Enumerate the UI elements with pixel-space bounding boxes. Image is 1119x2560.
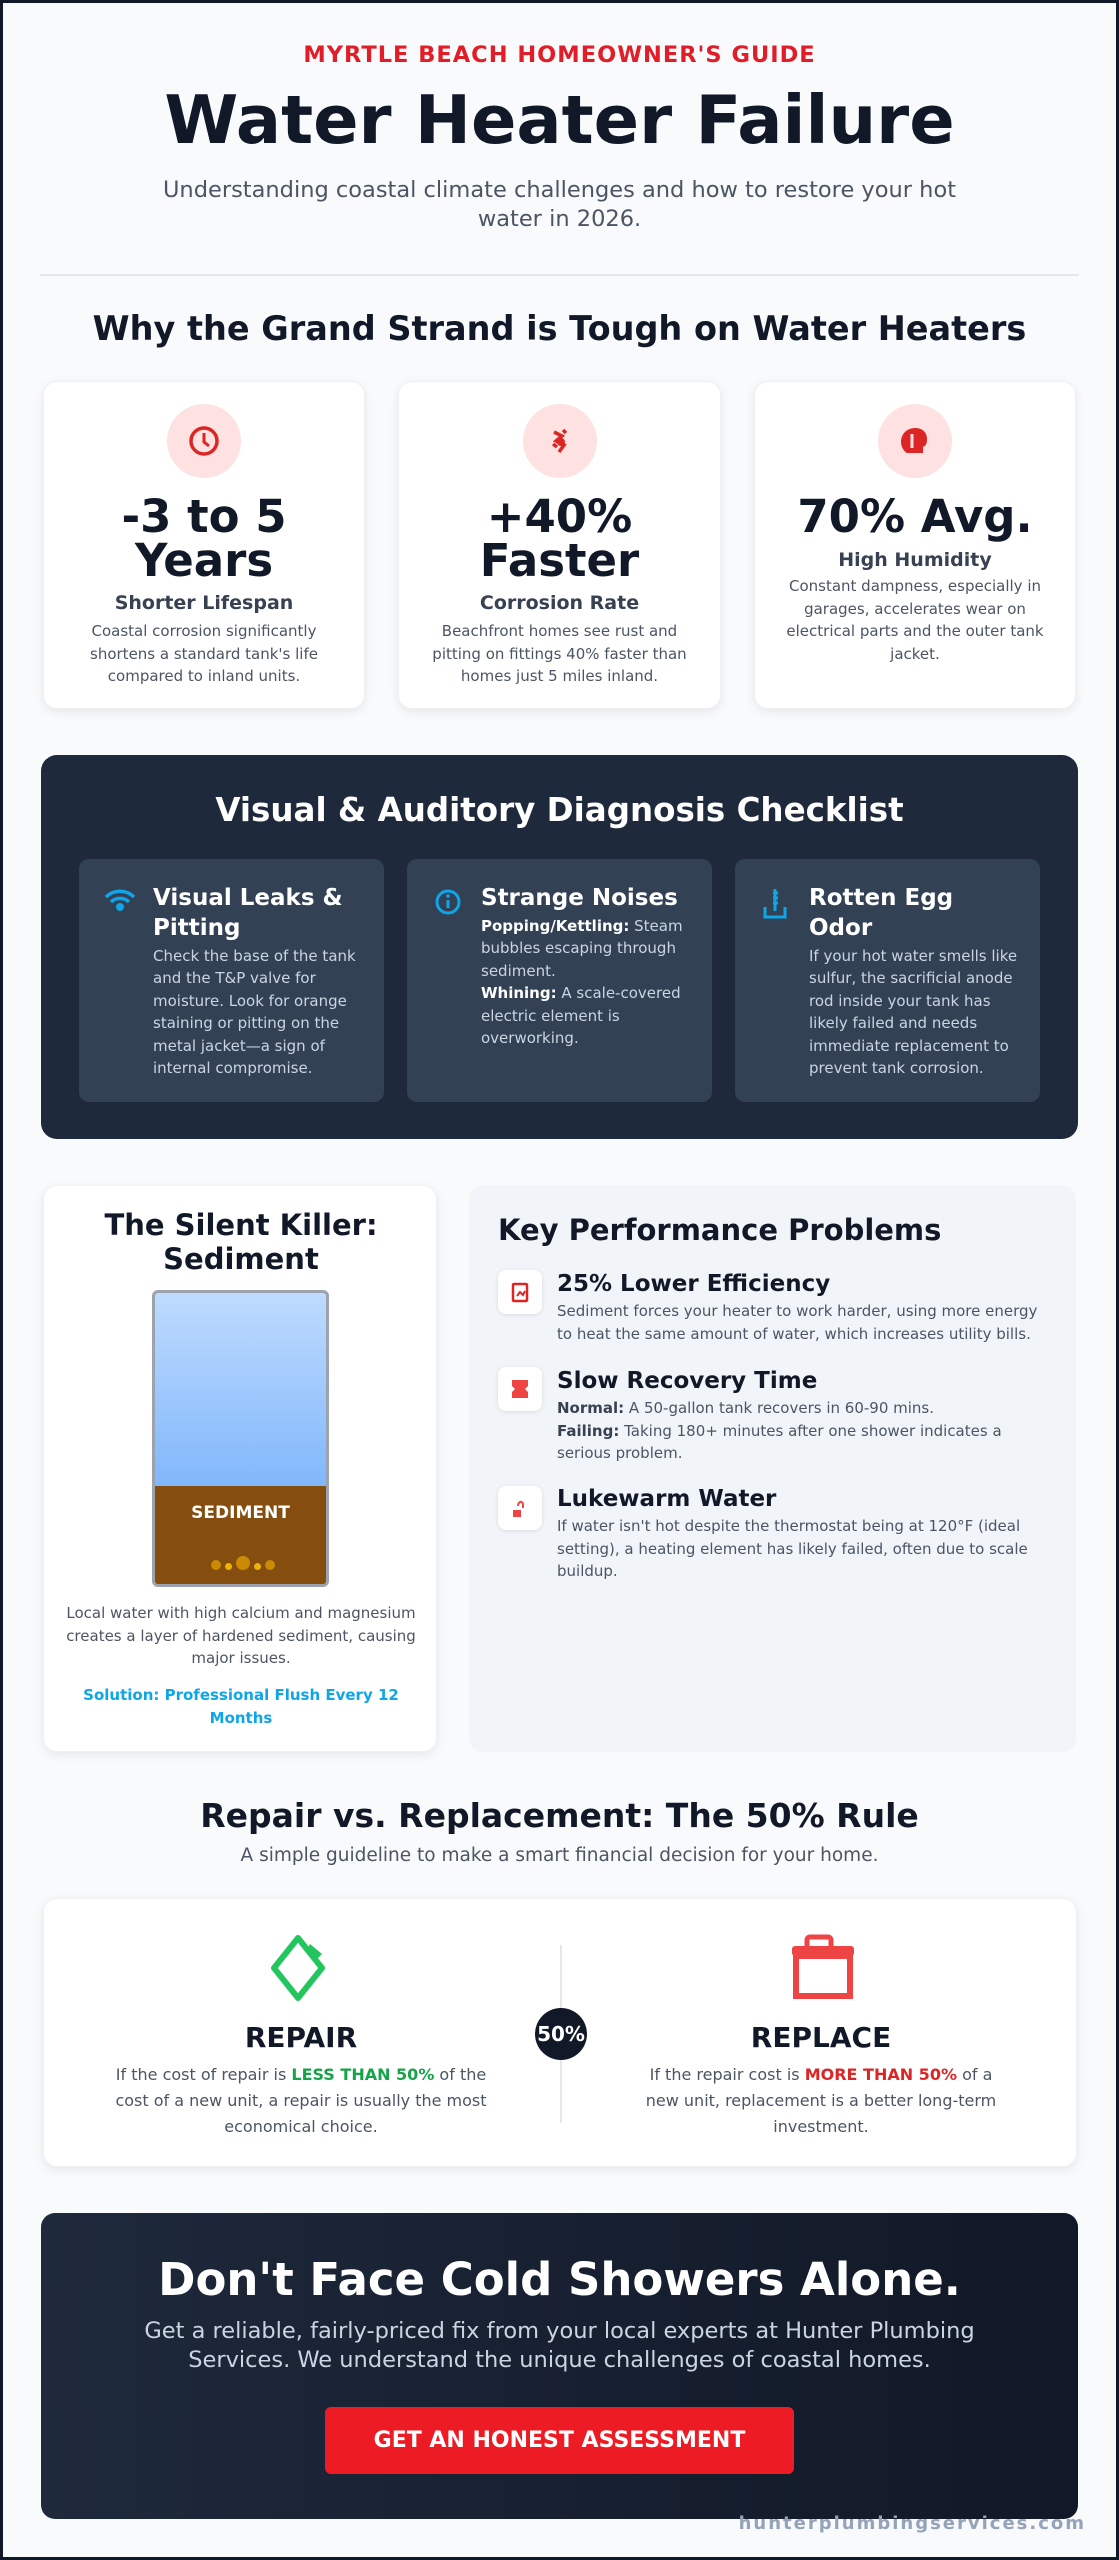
- divider: [560, 1945, 562, 2123]
- card: corrosion: Corrosion Rate: [480, 592, 639, 614]
- card: humidity: Constant dampness, especially in garages, accelerates wear on electrical parts and the outer tank jacket.: [786, 577, 1044, 662]
- tank illustration: [152, 1290, 329, 1587]
- card: leaks: [79, 859, 384, 1102]
- card: noises: [407, 859, 712, 1102]
- subtitle: Understanding coastal climate challenges and how to restore your hot water in 2026.: [163, 177, 956, 232]
- card: humidity: [754, 381, 1076, 709]
- icon: info: [436, 890, 460, 914]
- card: leaks: Check the base of the tank and the T&P valve for moisture. Look for orange staining or pitting on the metal jacket—a sign of internal compromise.: [153, 947, 356, 1077]
- footer url: hunterplumbingservices.com: [739, 2513, 1086, 2534]
- repair column: REPAIR: [245, 2021, 357, 2054]
- card: corrosion: +40%: [487, 490, 632, 543]
- card: lifespan: -3 to 5: [121, 490, 287, 543]
- badge: 50%: [535, 2008, 587, 2060]
- repair column: [115, 1935, 487, 2136]
- card: lifespan: Coastal corrosion significantly shortens a standard tank's life compared to inland units.: [90, 622, 318, 685]
- item: efficiency: [497, 1270, 1037, 1342]
- subheading: A simple guideline to make a smart financial decision for your home.: [241, 1845, 878, 1866]
- text: solution: Solution: Professional Flush Every 12 Months: [83, 1686, 399, 1727]
- icon: wrench: [270, 1935, 326, 2001]
- card: odor: [735, 859, 1040, 1102]
- icon: wifi drop: [104, 890, 136, 911]
- icon: humidity: [878, 404, 952, 478]
- card: corrosion: Beachfront homes see rust and pitting on fittings 40% faster than homes just 5 miles inland.: [432, 622, 687, 685]
- item: recovery: [497, 1367, 1002, 1462]
- item: efficiency: Sediment forces your heater to work harder, using more energy to heat the same amount of water, which increases utility bills.: [557, 1302, 1037, 1342]
- badge: 50%: 50%: [537, 2022, 585, 2046]
- text: sediment description: Local water with high calcium and magnesium creates a layer of hardened sediment, causing major issues.: [66, 1604, 416, 1667]
- card: noises: Strange Noises: [481, 885, 678, 911]
- item: recovery: Failing: Taking 180+ minutes after one shower indicates a serious problem.: [557, 1422, 1002, 1462]
- item: lukewarm: Lukewarm Water: [557, 1486, 776, 1512]
- button: GET AN HONEST ASSESSMENT: [374, 2428, 745, 2453]
- item: recovery: Normal: A 50-gallon tank recovers in 60-90 mins.: [557, 1399, 934, 1417]
- card: noises: Whining: A scale-covered electric element is overworking.: [481, 984, 681, 1047]
- card: lifespan: Years: [135, 534, 273, 587]
- panel: 50% rule: [43, 1898, 1077, 2167]
- icon: toolbox: [792, 1934, 854, 1999]
- panel: stat cards: [42, 381, 1076, 712]
- card: corrosion: Faster: [480, 534, 639, 587]
- card: corrosion: [398, 381, 721, 709]
- item: efficiency: 25% Lower Efficiency: [557, 1271, 830, 1297]
- heading: The Silent Killer:: [104, 1208, 378, 1242]
- section heading: repair vs replacement: Repair vs. Replacement: The 50% Rule: [200, 1796, 919, 1835]
- card: humidity: High Humidity: [838, 549, 992, 571]
- card: lifespan: [43, 381, 365, 709]
- replace column: REPLACE: [751, 2021, 891, 2054]
- icon: rust: [522, 404, 596, 478]
- tank illustration: SEDIMENT: [191, 1503, 290, 1523]
- heading: Key Performance Problems: [498, 1213, 941, 1247]
- panel: diagnosis checklist: [41, 755, 1078, 1139]
- icon: hourglass: [498, 1367, 542, 1411]
- heading: [104, 1208, 378, 1276]
- cta body: Get a reliable, fairly-priced fix from your local experts at Hunter Plumbing Services. We understand the unique challenges of coastal homes.: [144, 2318, 975, 2373]
- card: odor: Rotten Egg Odor: [809, 885, 953, 941]
- card: noises: Popping/Kettling: Steam bubbles escaping through sediment.: [481, 917, 683, 980]
- icon: faucet: [764, 889, 786, 918]
- heading: Sediment: [163, 1242, 319, 1276]
- icon: gauge: [498, 1270, 542, 1314]
- card: lifespan: Shorter Lifespan: [115, 592, 293, 614]
- replace column: [646, 1934, 996, 2136]
- card: leaks: Visual Leaks & Pitting: [153, 885, 343, 941]
- button: [325, 2407, 794, 2474]
- icon: thermometer: [498, 1486, 542, 1530]
- panel: sediment: [43, 1185, 437, 1752]
- replace column: If the repair cost is MORE THAN 50% of a new unit, replacement is a better long-term investment.: [646, 2065, 996, 2136]
- card: odor: If your hot water smells like sulfur, the sacrificial anode rod inside your tank has likely failed and needs immediate replacement to prevent tank corrosion.: [809, 947, 1017, 1077]
- item: recovery: Slow Recovery Time: [557, 1368, 817, 1394]
- heading: Visual & Auditory Diagnosis Checklist: [215, 791, 904, 829]
- panel: key performance problems: [469, 1185, 1076, 1752]
- item: lukewarm: If water isn't hot despite the thermostat being at 120°F (ideal setting), a heating element has likely failed, often due to scale buildup.: [557, 1517, 1028, 1580]
- cta heading: Don't Face Cold Showers Alone.: [158, 2253, 961, 2306]
- title: Water Heater Failure: [164, 81, 955, 159]
- card: humidity: 70% Avg.: [797, 490, 1033, 543]
- panel: call to action: [41, 2213, 1078, 2519]
- eyebrow: MYRTLE BEACH HOMEOWNER'S GUIDE: [303, 42, 816, 68]
- section heading: why: Why the Grand Strand is Tough on Water Heaters: [93, 309, 1026, 348]
- icon: clock: [167, 404, 241, 478]
- repair column: If the cost of repair is LESS THAN 50% of the cost of a new unit, a repair is usually the most economical choice.: [115, 2065, 487, 2136]
- item: lukewarm: [497, 1486, 1028, 1580]
